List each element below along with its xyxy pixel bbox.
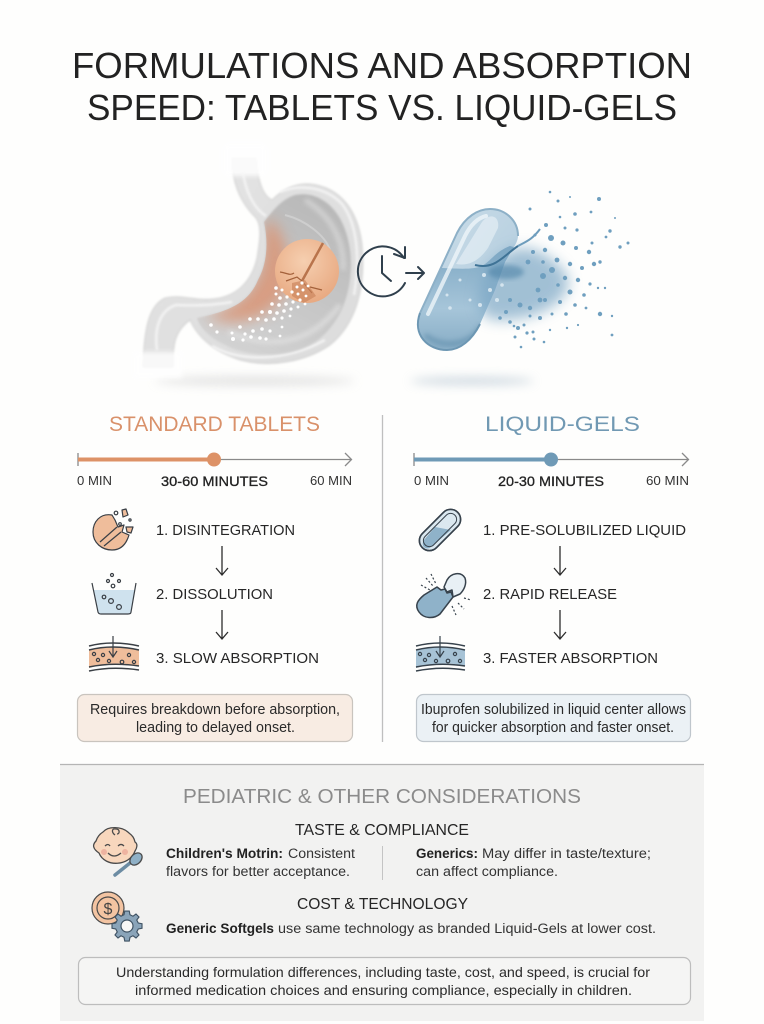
cost text: Generic Softgels [166, 921, 274, 936]
cost text: use same technology as branded Liquid-Gels at lower cost. [278, 921, 656, 936]
step: rapid release: 2. RAPID RELEASE [483, 586, 617, 603]
taste: children's motrin [166, 846, 355, 879]
droplets [498, 191, 630, 348]
white particles [209, 281, 309, 342]
duodenum fade [134, 352, 182, 378]
arrow [554, 610, 566, 639]
heading: liquid-gels: LIQUID-GELS [485, 412, 640, 436]
icon: clock with arrow [358, 246, 424, 296]
timeline: liquid-gels: 60 MIN [646, 473, 689, 488]
callout: liquid-gels: for quicker absorption and faster onset. [432, 720, 674, 736]
capsule highlight [428, 216, 486, 314]
arrow [216, 610, 228, 639]
divider [382, 415, 384, 742]
timeline: liquid-gels: 20-30 MINUTES [498, 473, 604, 489]
step: slow absorption: 3. SLOW ABSORPTION [156, 650, 319, 667]
step: pre-solubilized liquid: 1. PRE-SOLUBILIZED LIQUID [483, 522, 686, 539]
icon: faster absorption tissue [416, 636, 465, 671]
callout: summary: Understanding formulation differences, including taste, cost, and speed, is crucial for [116, 964, 650, 980]
taste: children's motrin: flavors for better acceptance. [166, 864, 350, 879]
step: dissolution: 2. DISSOLUTION [156, 586, 273, 603]
esophagus fade [224, 144, 266, 176]
splash core [478, 248, 568, 320]
icon: broken capsule release [417, 574, 471, 618]
timeline: liquid-gels: 0 MIN [414, 473, 449, 488]
tablet [275, 239, 339, 303]
panel heading: PEDIATRIC & OTHER CONSIDERATIONS [183, 785, 581, 808]
panel: liquid-gels [414, 412, 690, 742]
illustration: stomach with dissolving tablet [142, 174, 364, 388]
step: faster absorption: 3. FASTER ABSORPTION [483, 650, 658, 667]
illustration: liquid-gel capsule bursting [400, 191, 630, 385]
timeline: tablets: 0 MIN [77, 473, 112, 488]
panel: standard tablets [77, 412, 352, 742]
taste: children's motrin: Consistent [288, 846, 355, 861]
subheading: cost and technology: COST & TECHNOLOGY [297, 896, 468, 913]
icon: broken tablet [93, 509, 133, 550]
title: SPEED: TABLETS VS. LIQUID-GELS [87, 87, 677, 128]
stomach lumen [197, 194, 351, 354]
icon: slow absorption tissue [89, 636, 139, 671]
icon: coin and gear [92, 892, 142, 941]
stomach wall highlights [156, 172, 357, 357]
timeline: tablets: 30-60 MINUTES [161, 473, 268, 489]
taste: generics: Generics: [416, 846, 478, 861]
icon: beaker dissolving [92, 574, 136, 614]
icon: capsule with liquid [415, 505, 465, 555]
callout: summary [78, 958, 690, 1004]
panel: pediatric and other considerations [60, 764, 704, 1021]
title [72, 45, 692, 128]
timeline: liquid-gels [414, 452, 689, 489]
title: FORMULATIONS AND ABSORPTION [72, 45, 692, 86]
arrow [216, 546, 228, 575]
timeline: tablets [77, 452, 352, 489]
orange glow [205, 218, 289, 322]
subheading: taste and compliance: TASTE & COMPLIANCE [295, 822, 469, 839]
taste: generics [416, 846, 651, 879]
callout: tablets: Requires breakdown before absorption, [90, 702, 340, 718]
step: disintegration: 1. DISINTEGRATION [156, 522, 295, 539]
icon: baby with spoon [94, 828, 144, 875]
heading: standard tablets: STANDARD TABLETS [109, 412, 320, 436]
capsule body [418, 210, 518, 349]
callout: tablets: leading to delayed onset. [136, 720, 295, 736]
callout: tablets [78, 694, 352, 742]
taste: generics: can affect compliance. [416, 864, 558, 879]
arrow [554, 546, 566, 575]
taste: children's motrin: Children's Motrin: [166, 846, 283, 861]
callout: summary: informed medication choices and ensuring compliance, especially in children. [135, 982, 632, 998]
icon: coin and gear: $ [104, 901, 112, 918]
callout: liquid-gels: Ibuprofen solubilized in liquid center allows [421, 702, 686, 718]
taste: generics: May differ in taste/texture; [482, 846, 651, 861]
callout: liquid-gels [416, 694, 690, 742]
timeline: tablets: 60 MIN [310, 473, 352, 488]
